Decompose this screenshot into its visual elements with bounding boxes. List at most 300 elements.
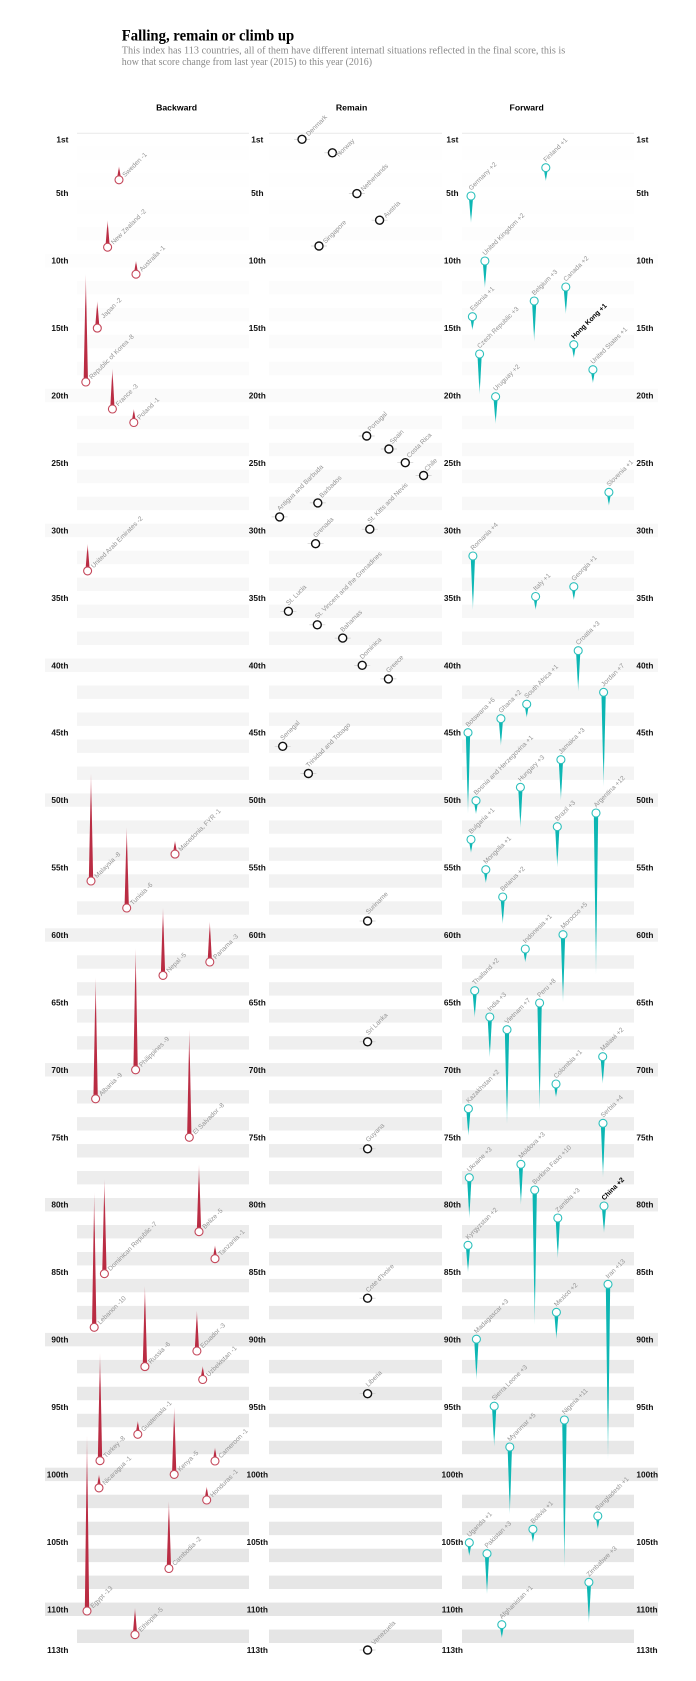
rank axis: third: 85th	[444, 1267, 461, 1277]
pin: Tanzania: Tanzania -1	[217, 1228, 247, 1258]
rank axis: far left: 55th	[51, 863, 68, 873]
rank axis: third: 1st	[446, 134, 459, 144]
rank axis: second: 113th	[247, 1645, 268, 1655]
pin: Iran: Iran +13	[605, 1258, 627, 1280]
pin: Uruguay	[492, 363, 522, 424]
pin: United Kingdom	[481, 212, 527, 288]
pin: Uganda	[465, 1511, 494, 1556]
rank axis: second: 85th	[249, 1267, 266, 1277]
panel: Backward countries	[82, 151, 250, 1639]
rank axis: far left: 95th	[51, 1402, 68, 1412]
marker: Guyana: Guyana	[365, 1122, 386, 1144]
pin: Finland	[542, 137, 570, 181]
pin: Panama: Panama -3	[212, 933, 240, 961]
background row stripes	[45, 133, 658, 1643]
marker: St. Vincent and the Grenadines: St. Vincent and the Grenadines	[314, 550, 384, 620]
marker: Grenada	[308, 516, 336, 548]
pin: Pakistan	[483, 1520, 513, 1594]
rank axis: far left: 100th	[47, 1469, 68, 1479]
pin: Cambodia: Cambodia -2	[171, 1536, 203, 1567]
pin: Mexico	[552, 1282, 580, 1339]
rank axis: far right: 1st	[636, 134, 649, 144]
pin: Romania	[469, 522, 500, 610]
rank axis: third: 80th	[444, 1200, 461, 1210]
marker: Norway	[324, 137, 357, 158]
rank axis: far left: 70th	[51, 1065, 68, 1075]
pin: Zimbabwe	[585, 1545, 619, 1623]
rank axis: second	[246, 134, 268, 1655]
marker: Senegal: Senegal	[279, 719, 302, 742]
pin: Germany: Germany +2	[468, 161, 499, 192]
marker: Austria: Austria	[383, 200, 402, 220]
pin: Canada: Canada +2	[562, 255, 591, 283]
marker: Portugal: Portugal	[367, 410, 389, 433]
rank axis: far right: 25th	[636, 458, 653, 468]
rank axis: far left: 113th	[47, 1645, 68, 1655]
rank axis: far left: 65th	[51, 997, 68, 1007]
marker: Sri Lanka: Sri Lanka	[365, 1012, 390, 1037]
pin: Italy: Italy +1	[532, 572, 553, 593]
marker: Singapore	[311, 219, 348, 250]
pin: Russia: Russia -6	[147, 1341, 172, 1366]
pin: Turkey: Turkey -8	[102, 1435, 127, 1460]
rank axis: far right: 110th	[636, 1604, 658, 1614]
pin: Turkey	[96, 1353, 127, 1465]
pin: Argentina: Argentina +12	[593, 775, 627, 809]
pin: South Africa: South Africa +1	[523, 663, 560, 700]
pin: Burkina Faso: Burkina Faso +10	[531, 1144, 573, 1186]
rank axis: second: 80th	[249, 1200, 266, 1210]
pin: Australia: Australia -1	[138, 244, 167, 273]
pin: Nigeria	[560, 1387, 590, 1568]
marker: Norway: Norway	[335, 137, 357, 158]
marker: Suriname	[360, 891, 390, 925]
pin: India: India +3	[486, 991, 508, 1013]
rank axis: far left: 20th	[51, 390, 68, 400]
rank axis: third: 10th	[444, 256, 461, 266]
pin: Madagascar: Madagascar +3	[473, 1298, 511, 1335]
pin: Egypt: Egypt -13	[89, 1585, 115, 1610]
rank axis: third: 25th	[444, 458, 461, 468]
pin: Macedonia, FYR: Macedonia, FYR -1	[177, 808, 223, 853]
pin: Australia	[132, 244, 167, 278]
rank axis: second: 90th	[249, 1335, 266, 1345]
pin: Sweden: Sweden -1	[121, 151, 149, 179]
rank axis: far right: 10th	[636, 256, 653, 266]
rank axis: far left	[47, 134, 69, 1655]
subtitle	[122, 45, 565, 68]
pin: New Zealand: New Zealand -2	[110, 208, 148, 246]
pin: Iran	[604, 1258, 627, 1460]
pin: Madagascar	[472, 1298, 511, 1380]
rank axis: far left: 35th	[51, 593, 68, 603]
pin: Ghana	[497, 689, 523, 746]
marker: Greece	[380, 654, 406, 683]
pin: Belgium	[530, 268, 560, 342]
pin: Peru: Peru +8	[536, 977, 558, 999]
pin: Belize: Belize -5	[201, 1207, 225, 1231]
rank axis: second: 40th	[249, 660, 266, 670]
pin: United States: United States +1	[590, 326, 629, 366]
rank axis: third: 15th	[444, 323, 461, 333]
pin: Bolivia	[529, 1500, 555, 1543]
pin: Serbia	[599, 1094, 625, 1177]
pin: Colombia: Colombia +1	[553, 1049, 584, 1080]
pin: Honduras	[203, 1468, 240, 1504]
marker: Dominica: Dominica	[359, 636, 383, 661]
marker: St. Lucia: St. Lucia	[285, 584, 308, 607]
pin: Kenya	[170, 1407, 201, 1478]
column heading: Remain: Remain	[336, 102, 367, 112]
pin: Japan	[93, 297, 124, 332]
rank axis: second: 1st	[251, 134, 264, 144]
pin: Georgia	[570, 554, 599, 600]
pin: China (highlighted)	[600, 1177, 626, 1233]
rank axis: third: 45th	[444, 728, 461, 738]
rank axis: far left: 90th	[51, 1335, 68, 1345]
marker: Barbados	[310, 474, 344, 507]
pin: Myanmar: Myanmar +5	[506, 1412, 538, 1443]
rank axis: third: 55th	[444, 863, 461, 873]
pin: Ukraine: Ukraine +3	[466, 1146, 494, 1174]
marker: Costa Rica	[397, 432, 434, 467]
marker: Venezuela: Venezuela	[371, 1620, 398, 1647]
pin: Brazil: Brazil +3	[554, 799, 577, 823]
marker: Senegal	[275, 719, 302, 750]
rank axis: far right: 35th	[636, 593, 653, 603]
marker: Chile: Chile	[423, 457, 439, 473]
marker: Venezuela	[360, 1620, 398, 1654]
rank axis: far right: 60th	[636, 930, 653, 940]
rank axis: far right: 40th	[636, 660, 653, 670]
pin: Malawi: Malawi +2	[599, 1026, 626, 1053]
rank axis: far left: 15th	[51, 323, 68, 333]
marker: Netherlands	[349, 162, 390, 198]
marker: Portugal	[359, 410, 389, 440]
marker: Singapore: Singapore	[322, 219, 348, 245]
pin: Moldova	[517, 1131, 547, 1205]
pin: Czech Republic	[476, 306, 521, 394]
pin: Croatia	[574, 620, 602, 691]
marker: Chile	[416, 457, 439, 480]
rank axis: second: 50th	[249, 795, 266, 805]
rank axis: third: 35th	[444, 593, 461, 603]
marker: Trinidad and Tobago: Trinidad and Tobago	[305, 722, 353, 769]
pin: Afghanistan: Afghanistan +1	[498, 1584, 535, 1621]
rank axis: third: 60th	[444, 930, 461, 940]
rank axis: second: 15th	[249, 323, 266, 333]
rank axis: second: 20th	[249, 390, 266, 400]
pin: Zimbabwe: Zimbabwe +3	[586, 1545, 619, 1578]
pin: Vietnam: Vietnam +7	[504, 997, 532, 1026]
rank axis: second: 25th	[249, 458, 266, 468]
pin: Uruguay: Uruguay +2	[492, 363, 522, 393]
pin: Botswana: Botswana +6	[465, 696, 497, 729]
rank axis: far left: 30th	[51, 525, 68, 535]
pin: Thailand: Thailand +2	[471, 957, 501, 987]
rank axis: second: 100th	[246, 1469, 268, 1479]
pin: Ethiopia	[131, 1606, 165, 1639]
rank axis: far right: 105th	[636, 1537, 658, 1547]
rank axis: third: 100th	[442, 1469, 463, 1479]
pin: Indonesia: Indonesia +1	[522, 913, 554, 945]
marker: St. Kitts and Nevis: St. Kitts and Nevis	[366, 481, 410, 525]
rank axis: far right: 80th	[636, 1200, 653, 1210]
pin: Guatemala: Guatemala -1	[140, 1400, 174, 1433]
pin: Honduras: Honduras -1	[209, 1468, 240, 1499]
rank axis: third: 50th	[444, 795, 461, 805]
pin: Thailand	[471, 957, 501, 1018]
panel: Remain countries	[272, 114, 439, 1654]
pin: France	[108, 368, 140, 413]
pin: Japan: Japan -2	[100, 297, 124, 320]
pin: Argentina	[592, 775, 627, 975]
pin: Albania: Albania -9	[98, 1072, 124, 1098]
rank axis: third: 40th	[444, 660, 461, 670]
rank axis: far left: 45th	[51, 728, 68, 738]
pin: Czech Republic: Czech Republic +3	[476, 306, 521, 350]
pin: Russia	[141, 1286, 172, 1371]
pin: Germany	[467, 161, 499, 223]
rank axis: third: 105th	[442, 1537, 463, 1547]
rank axis: far left: 10th	[51, 256, 68, 266]
rank axis: far right: 70th	[636, 1065, 653, 1075]
rank axis: far left: 40th	[51, 660, 68, 670]
pin: Vietnam	[503, 997, 532, 1124]
pin: Bangladesh	[594, 1476, 631, 1530]
pin: Botswana	[464, 696, 497, 814]
marker: Denmark: Denmark	[305, 114, 329, 138]
pin: El Salvador: El Salvador -8	[192, 1102, 226, 1136]
pin: Bulgaria	[467, 807, 497, 853]
rank axis: far right: 15th	[636, 323, 653, 333]
pin: Georgia: Georgia +1	[570, 554, 599, 583]
rank axis: far right: 20th	[636, 390, 653, 400]
rank axis: far left: 5th	[56, 188, 68, 198]
pin: Ecuador: Ecuador -3	[199, 1322, 227, 1350]
rank axis: second: 35th	[249, 593, 266, 603]
rank axis: second: 55th	[249, 863, 266, 873]
marker: Austria	[372, 200, 402, 224]
pin: Morocco	[559, 901, 589, 1002]
pin: Philippines	[132, 948, 171, 1074]
pin: Belgium: Belgium +3	[531, 268, 560, 297]
rank axis: far left: 60th	[51, 930, 68, 940]
pin: Nepal: Nepal -5	[165, 952, 188, 974]
pin: Jordan: Jordan +7	[600, 662, 626, 688]
rank axis: second: 70th	[249, 1065, 266, 1075]
pin: Poland: Poland -1	[136, 396, 161, 421]
rank axis: third: 65th	[444, 997, 461, 1007]
pin: Sierra Leone	[490, 1364, 529, 1447]
marker: Barbados: Barbados	[318, 474, 344, 500]
pin: Malaysia	[87, 773, 122, 885]
pin: Republic of Korea	[82, 274, 136, 386]
pin: Sweden	[115, 151, 149, 184]
title: Falling, remain or climb up	[122, 28, 294, 45]
rank axis: far right: 55th	[636, 863, 653, 873]
pin: Zambia: Zambia +3	[554, 1187, 582, 1214]
rank axis: second: 10th	[249, 256, 266, 266]
pin: Cambodia	[165, 1501, 203, 1572]
rank axis: far right: 85th	[636, 1267, 653, 1277]
marker: Spain	[381, 429, 406, 453]
marker: Bahamas: Bahamas	[339, 609, 365, 634]
pin: Croatia: Croatia +3	[575, 620, 602, 647]
rank axis: second: 75th	[249, 1132, 266, 1142]
pin: Lebanon: Lebanon -10	[97, 1295, 128, 1326]
pin: Indonesia	[521, 913, 554, 962]
rank axis: far right: 95th	[636, 1402, 653, 1412]
pin: Albania	[92, 977, 124, 1103]
pin: Ghana: Ghana +2	[498, 689, 523, 715]
marker: Guyana	[360, 1122, 386, 1153]
rank axis: second: 5th	[251, 188, 264, 198]
pin: Italy	[532, 572, 553, 610]
rank axis: third: 20th	[444, 390, 461, 400]
marker: Antigua and Barbuda: Antigua and Barbuda	[276, 464, 325, 513]
pin: Afghanistan	[498, 1584, 535, 1638]
pin: Panama	[206, 922, 240, 966]
marker: Denmark	[294, 114, 329, 143]
marker: Greece: Greece	[385, 654, 406, 675]
pin: South Africa	[523, 663, 560, 718]
pin: Romania: Romania +4	[470, 522, 500, 552]
rank axis: third: 30th	[444, 525, 461, 535]
pin: Kyrgyzstan	[464, 1206, 500, 1272]
pin: Ukraine	[465, 1146, 494, 1218]
pin: Mongolia	[482, 835, 513, 883]
pin: Malaysia: Malaysia -8	[93, 851, 122, 880]
marker: Cote d'Ivoire	[360, 1263, 396, 1302]
rank axis: far left: 75th	[51, 1132, 68, 1142]
pin: Uzbekistan: Uzbekistan -1	[205, 1345, 239, 1378]
pin: Belarus	[499, 865, 527, 924]
pin: France: France -3	[115, 383, 140, 408]
marker: Dominica	[354, 636, 383, 669]
pin: Myanmar	[506, 1412, 538, 1514]
rank axis: third: 90th	[444, 1335, 461, 1345]
rank axis: far right: 5th	[636, 188, 649, 198]
pin: United States	[589, 326, 629, 383]
marker: Grenada: Grenada	[312, 516, 336, 539]
pin: Republic of Korea: Republic of Korea -8	[88, 333, 136, 381]
pin: Uganda: Uganda +1	[466, 1511, 494, 1539]
rank axis: third: 70th	[444, 1065, 461, 1075]
rank axis: third: 95th	[444, 1402, 461, 1412]
rank axis: third: 5th	[446, 188, 459, 198]
marker: Spain: Spain	[389, 429, 406, 446]
panel: Forward countries	[464, 137, 635, 1638]
pin: Moldova: Moldova +3	[518, 1131, 547, 1160]
rank axis: third: 110th	[442, 1604, 463, 1614]
pin: Bulgaria: Bulgaria +1	[468, 807, 497, 836]
rank axis: second: 45th	[249, 728, 266, 738]
rank axis: far right: 50th	[636, 795, 653, 805]
pin: Bangladesh: Bangladesh +1	[594, 1476, 631, 1512]
rank axis: far left: 85th	[51, 1267, 68, 1277]
column heading: Backward: Backward	[156, 102, 197, 112]
rank axis: far right: 45th	[636, 728, 653, 738]
pin: Morocco: Morocco +5	[560, 901, 589, 931]
marker: Netherlands: Netherlands	[360, 162, 390, 193]
pin: Hungary: Hungary +3	[517, 754, 546, 783]
pin: Belize	[195, 1164, 225, 1236]
pin: Estonia	[468, 285, 496, 330]
pin: Nicaragua: Nicaragua -1	[101, 1455, 133, 1487]
pin: Kazakhstan	[464, 1069, 501, 1136]
rank axis: far left: 1st	[56, 134, 69, 144]
marker: Costa Rica: Costa Rica	[406, 432, 434, 460]
marker: St. Lucia	[280, 584, 308, 615]
pin: El Salvador	[185, 1029, 226, 1141]
rank axis: third	[442, 134, 463, 1655]
pin: Dominican Republic: Dominican Republic -7	[107, 1221, 159, 1273]
pin: Cameroon: Cameroon -1	[217, 1428, 250, 1460]
pin: Zambia	[554, 1187, 582, 1258]
pin: Ethiopia: Ethiopia -5	[137, 1606, 165, 1634]
pin: Kazakhstan: Kazakhstan +2	[465, 1069, 501, 1105]
pin: Jordan	[600, 662, 626, 787]
pin: Hong Kong (highlighted): Hong Kong +1	[570, 302, 609, 341]
rank axis: far left: 105th	[47, 1537, 68, 1547]
rank axis: far right: 100th	[636, 1469, 658, 1479]
pin: Mexico: Mexico +2	[553, 1282, 580, 1308]
pin: United Kingdom: United Kingdom +2	[482, 212, 527, 257]
pin: Poland	[130, 396, 161, 426]
marker: Bahamas	[335, 609, 365, 642]
rank axis: second: 30th	[249, 525, 266, 535]
pin: Nepal	[159, 908, 188, 979]
pin: Tunisia	[123, 827, 155, 912]
pin: Finland: Finland +1	[542, 137, 570, 164]
rank axis: far left: 110th	[47, 1604, 68, 1614]
pin: Hungary	[516, 754, 546, 828]
pin: Belarus: Belarus +2	[499, 865, 527, 893]
rank axis: second: 60th	[249, 930, 266, 940]
pin: Philippines: Philippines -9	[138, 1036, 171, 1069]
pin: Bolivia: Bolivia +1	[530, 1500, 555, 1525]
rank axis: far left: 50th	[51, 795, 68, 805]
pin: Sierra Leone: Sierra Leone +3	[491, 1364, 529, 1402]
pin: Canada	[562, 255, 591, 314]
pin: Brazil	[553, 799, 577, 867]
rank axis: second: 105th	[246, 1537, 268, 1547]
rank axis: second: 95th	[249, 1402, 266, 1412]
rank axis: far right: 65th	[636, 997, 653, 1007]
marker: Sri Lanka	[360, 1012, 390, 1046]
rank axis: far left: 25th	[51, 458, 68, 468]
pin: Colombia	[552, 1049, 584, 1098]
pin: Egypt	[83, 1436, 115, 1615]
rank axis: second: 65th	[249, 997, 266, 1007]
rank axis: third: 75th	[444, 1132, 461, 1142]
rank axis: second: 110th	[247, 1604, 268, 1614]
pin: Estonia: Estonia +1	[469, 285, 496, 313]
rank axis: far right: 113th	[636, 1645, 658, 1655]
pin: Serbia: Serbia +4	[600, 1094, 625, 1119]
rank axis: far right: 90th	[636, 1335, 653, 1345]
marker: Liberia: Liberia	[365, 1369, 384, 1389]
pin: Dominican Republic	[100, 1179, 159, 1278]
marker: Liberia	[360, 1369, 384, 1398]
pin: Lebanon	[90, 1192, 128, 1331]
rank axis: far left: 80th	[51, 1200, 68, 1210]
column heading: Forward: Forward	[510, 102, 544, 112]
pin: Tunisia: Tunisia -6	[129, 881, 155, 907]
rank axis: third: 113th	[442, 1645, 463, 1655]
pin: Hong Kong (highlighted)	[570, 302, 609, 358]
